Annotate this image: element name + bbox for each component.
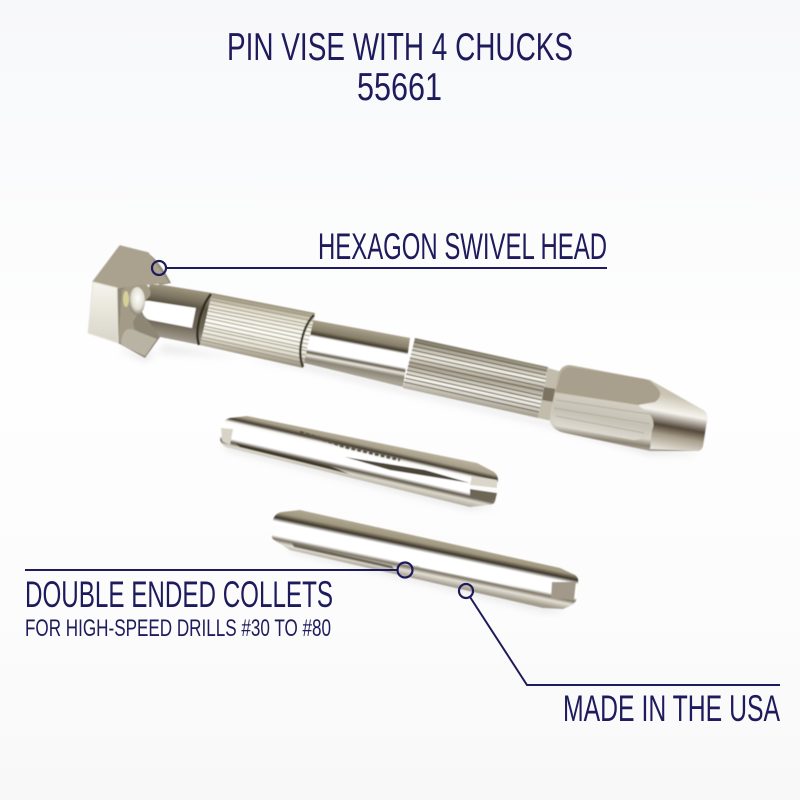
callout: made in the usa xyxy=(459,584,780,729)
title: 55661 xyxy=(357,66,442,109)
middle shaft xyxy=(300,320,410,387)
collet 1 shadow xyxy=(225,440,495,510)
callout: double ended collets xyxy=(25,562,412,642)
tool shadow xyxy=(118,345,702,455)
collet 1 xyxy=(220,416,498,510)
callout: hexagon swivel head xyxy=(152,226,607,275)
collar xyxy=(538,368,562,421)
collet 1 body xyxy=(220,416,498,507)
collet 2 xyxy=(272,510,578,612)
callout: double ended collets: DOUBLE ENDED COLLETS xyxy=(25,574,333,615)
hexagonal nose cone xyxy=(550,365,707,451)
collet 2 details xyxy=(290,529,576,600)
knurled grip 2 xyxy=(403,338,548,418)
callout: hexagon swivel head: HEXAGON SWIVEL HEAD xyxy=(318,226,607,267)
title: PIN VISE WITH 4 CHUCKS xyxy=(227,26,573,69)
pin vise tool xyxy=(88,246,707,455)
rear shaft and neck xyxy=(140,284,212,345)
title xyxy=(227,26,573,109)
collet 2 body xyxy=(272,510,578,609)
collet 1 slots and marks xyxy=(221,428,498,501)
hexagon swivel head xyxy=(88,246,171,358)
collet 2 shadow xyxy=(290,545,565,612)
callout: double ended collets: FOR HIGH-SPEED DRILLS #30 TO #80 xyxy=(25,615,331,642)
knurled grip 1 xyxy=(197,293,315,368)
